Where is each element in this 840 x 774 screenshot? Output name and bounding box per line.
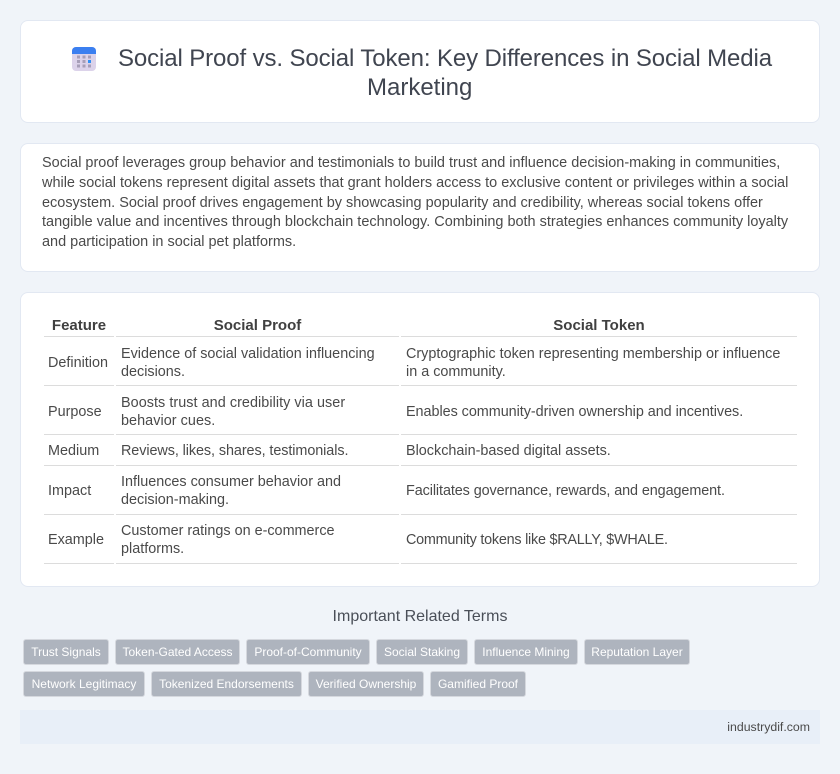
row: definition: decisions. [121,364,185,380]
related terms tags: Social Staking [384,645,460,659]
intro paragraph: ecosystem. Social proof drives engagement by showcasing popularity and credibility, whereas social tokens offer [42,195,763,211]
row: definition: Definition [48,355,108,371]
related terms tags: Proof-of-Community [254,645,362,659]
row: example [48,523,668,557]
intro paragraph: while social tokens represent digital assets that grant holders access to exclusive content or privileges within a social [42,175,788,191]
intro paragraph: tangible value and incentives through blockchain technology. Combining both strategies enhances community loyalty [42,214,788,230]
related terms tags: Token-Gated Access [122,645,233,659]
row: medium [48,443,611,459]
title: Social Proof vs. Social Token: Key Differences in Social Media [118,45,772,72]
comparison table card [20,292,820,587]
related terms tags: Verified Ownership [316,677,416,691]
header card [20,20,820,123]
row: definition: Cryptographic token representing membership or influence [406,346,780,362]
footer source text: industrydif.com [727,720,810,734]
row: purpose: Enables community-driven ownership and incentives. [406,404,743,420]
title [118,45,772,101]
related terms tags: Network Legitimacy [32,677,136,691]
row: medium: Reviews, likes, shares, testimonials. [121,443,348,459]
row: definition: Evidence of social validation influencing [121,346,375,362]
row: example: Example [48,532,104,548]
row: medium: Medium [48,443,99,459]
row: example: Customer ratings on e-commerce [121,523,335,539]
footer band [20,710,820,744]
table header row [52,317,645,334]
related terms tags: Influence Mining [482,645,570,659]
row: impact: Impact [48,483,91,499]
row: purpose: behavior cues. [121,413,215,429]
intro paragraph [42,155,788,250]
row: impact: Facilitates governance, rewards, and engagement. [406,483,725,499]
row: purpose [48,395,743,429]
table header row: Social Token [553,317,645,334]
related terms heading: Important Related Terms [333,608,507,625]
row: impact [48,474,725,508]
related terms tags: Reputation Layer [591,645,683,659]
row: medium: Blockchain-based digital assets. [406,443,611,459]
row: purpose: Boosts trust and credibility via user [121,395,345,411]
row: example: Community tokens like $RALLY, $WHALE. [406,532,668,548]
intro paragraph: and participation in social pet platforms. [42,234,296,250]
row: definition [48,346,780,380]
related terms tags: Trust Signals [31,645,101,659]
row: purpose: Purpose [48,404,102,420]
row: example: platforms. [121,541,184,557]
row: definition: in a community. [406,364,506,380]
related terms tags: Tokenized Endorsements [159,677,294,691]
row: impact: Influences consumer behavior and [121,474,341,490]
table header row: Feature [52,317,106,334]
table header row: Social Proof [214,317,301,334]
title: Marketing [367,74,472,101]
intro text card [20,143,820,272]
row: impact: decision-making. [121,492,229,508]
related terms tags [23,639,690,697]
intro paragraph: Social proof leverages group behavior and testimonials to build trust and influence decision-making in communities, [42,155,780,171]
icon: calendar [72,47,96,71]
related terms tags: Gamified Proof [438,677,518,691]
